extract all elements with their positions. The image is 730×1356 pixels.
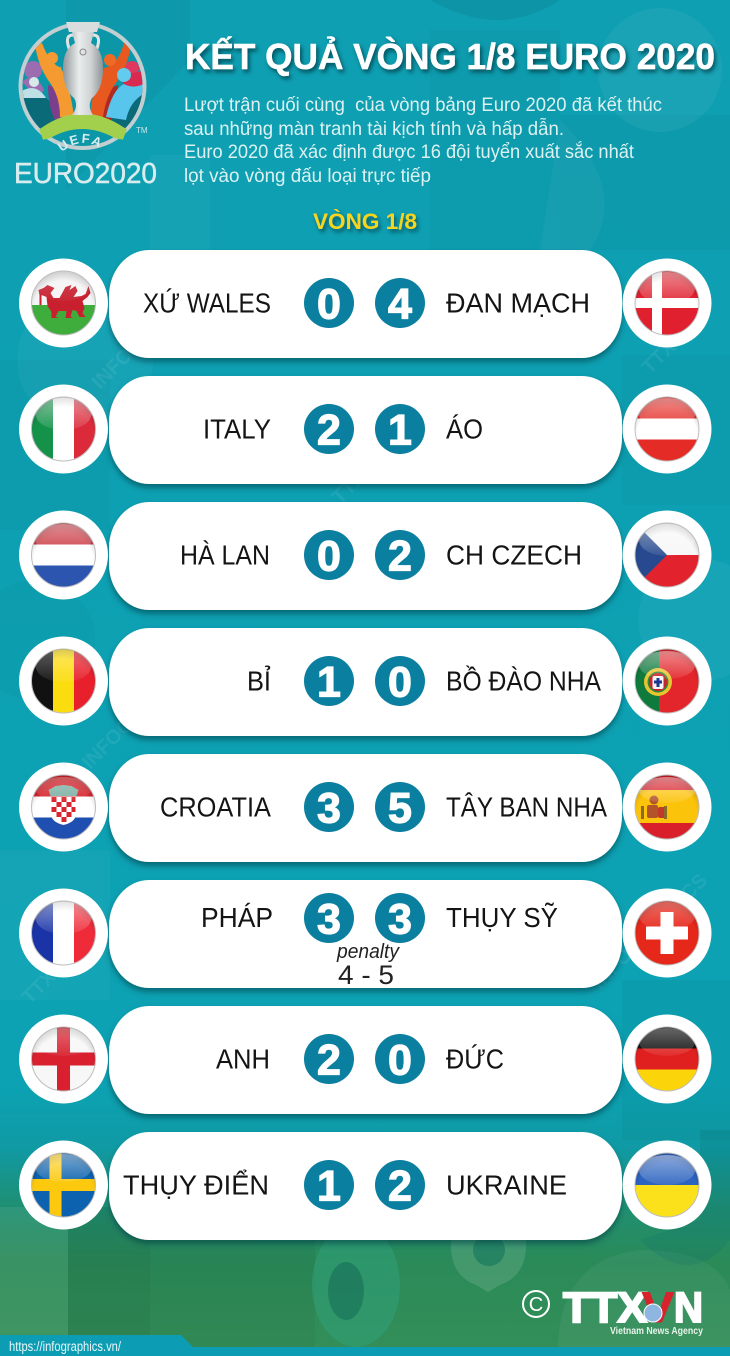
score (375, 1034, 425, 1084)
flag: Italy (19, 384, 108, 474)
pill (109, 880, 622, 988)
logo green arc (41, 115, 125, 138)
watermarks (18, 270, 712, 1009)
match: Belgium vs Portugal: 1 (317, 658, 341, 706)
team name: PHÁP (201, 902, 273, 933)
score (375, 278, 425, 328)
watermarks: INFOGRAPHICS (88, 270, 212, 394)
copyright icon (523, 1291, 549, 1317)
flag: Portugal (622, 636, 712, 726)
score (375, 1160, 425, 1210)
score (375, 782, 425, 832)
team name: THỤY ĐIỂN (123, 1170, 269, 1200)
flag: Ukraine (622, 1140, 712, 1230)
score (304, 404, 354, 454)
penalty score: 4 - 5 (338, 960, 394, 990)
intro text (184, 94, 662, 187)
team name: THỤY SỸ (446, 902, 558, 933)
team name: HÀ LAN (180, 540, 270, 570)
match: Wales vs Denmark (19, 250, 712, 358)
TTXVN logo (563, 1284, 703, 1337)
intro text: Lượt trận cuối cùng của vòng bảng Euro 2020 đã kết thúc (184, 94, 662, 116)
match: Italy vs Austria: 1 (388, 406, 412, 454)
title: KẾT QUẢ VÒNG 1/8 EURO 2020 (185, 35, 715, 77)
flag: Switzerland (622, 888, 712, 978)
match: England vs Germany: 0 (388, 1036, 412, 1084)
match: Croatia vs Spain: 3 (317, 784, 341, 832)
watermarks: INFOGRAPHICS (78, 650, 202, 774)
flag: Czech Republic (622, 510, 712, 600)
TTXVN logo: TTX (563, 1284, 647, 1332)
pill (109, 250, 622, 358)
team name: ĐỨC (446, 1044, 504, 1074)
match: Sweden vs Ukraine (19, 1132, 712, 1240)
team name: XỨ WALES (143, 288, 271, 318)
logo ring (20, 24, 144, 148)
watermarks: INFOGRAPHICS (588, 870, 712, 994)
intro text: lọt vào vòng đấu loại trực tiếp (184, 165, 431, 187)
match: Netherlands vs Czech Republic: 2 (388, 532, 412, 580)
match: Croatia vs Spain: 5 (388, 784, 412, 832)
red V: V (642, 1284, 674, 1332)
score (375, 530, 425, 580)
pill (109, 1132, 622, 1240)
match: Italy vs Austria: 2 (317, 406, 341, 454)
flag: Croatia (19, 762, 108, 852)
score (304, 893, 354, 943)
pill (109, 628, 622, 736)
pill (109, 502, 622, 610)
score (375, 656, 425, 706)
section heading: VÒNG 1/8 (313, 209, 417, 234)
score (304, 530, 354, 580)
team name: BỒ ĐÀO NHA (446, 666, 601, 696)
flag: Spain (622, 762, 712, 852)
score (304, 1160, 354, 1210)
intro text: sau những màn tranh tài kịch tính và hấp dẫn. (184, 117, 564, 140)
pill (109, 376, 622, 484)
match: Belgium vs Portugal: 0 (388, 658, 412, 706)
footer bar (0, 1335, 730, 1356)
flag: Austria (622, 384, 712, 474)
team name: ITALY (203, 414, 271, 444)
logo: UEFA Euro 2020 (14, 22, 157, 190)
penalty label: penalty (336, 941, 400, 963)
flag: England (19, 1014, 108, 1104)
flag: Sweden (19, 1140, 108, 1230)
match: Croatia vs Spain (19, 754, 712, 862)
flag: Denmark (622, 258, 712, 348)
match: Italy vs Austria (19, 376, 712, 484)
match: England vs Germany (19, 1006, 712, 1114)
match: Sweden vs Ukraine: 2 (388, 1162, 412, 1210)
team name: ANH (216, 1044, 270, 1074)
team name: CROATIA (160, 792, 271, 822)
TTXVN logo: Vietnam News Agency (610, 1326, 703, 1337)
team name: ÁO (446, 414, 483, 444)
flag: Germany (622, 1014, 712, 1104)
watermarks: TTXVN (18, 947, 80, 1009)
logo figures (22, 43, 142, 128)
intro text: Euro 2020 đã xác định được 16 đội tuyển xuất sắc nhất (184, 140, 635, 163)
match: France vs Switzerland: 3 (317, 896, 341, 944)
logo trademark: TM (136, 126, 148, 135)
pill (109, 754, 622, 862)
score (304, 278, 354, 328)
watermarks: TTXVN (638, 317, 700, 379)
flag: Wales (19, 258, 108, 348)
flag: Belgium (19, 636, 108, 726)
globe (644, 1304, 662, 1322)
pill (109, 1006, 622, 1114)
match: Wales vs Denmark: 4 (388, 280, 412, 328)
score (304, 656, 354, 706)
score (375, 893, 425, 943)
logo wordmark: EURO2020 (14, 158, 157, 190)
match: England vs Germany: 2 (317, 1036, 341, 1084)
match: France vs Switzerland (19, 880, 712, 990)
match: Belgium vs Portugal (19, 628, 712, 736)
score (304, 1034, 354, 1084)
logo trophy (63, 22, 103, 115)
logo UEFA: UEFA (57, 134, 100, 150)
score (304, 782, 354, 832)
team name: ĐAN MẠCH (446, 288, 590, 318)
team name: UKRAINE (446, 1170, 567, 1200)
score (375, 404, 425, 454)
source url: https://infographics.vn/ (9, 1339, 121, 1354)
TTXVN logo: N (674, 1284, 703, 1332)
team name: CH CZECH (446, 540, 582, 570)
match: Netherlands vs Czech Republic: 0 (317, 532, 341, 580)
watermarks: TTXVN (328, 447, 390, 509)
team name: BỈ (247, 664, 271, 696)
copyright icon: C (529, 1294, 543, 1316)
match: Sweden vs Ukraine: 1 (317, 1162, 341, 1210)
flag: France (19, 888, 108, 978)
match: Netherlands vs Czech Republic (19, 502, 712, 610)
match: France vs Switzerland: 3 (388, 896, 412, 944)
match: Wales vs Denmark: 0 (317, 280, 341, 328)
flag: Netherlands (19, 510, 108, 600)
team name: TÂY BAN NHA (446, 792, 607, 822)
